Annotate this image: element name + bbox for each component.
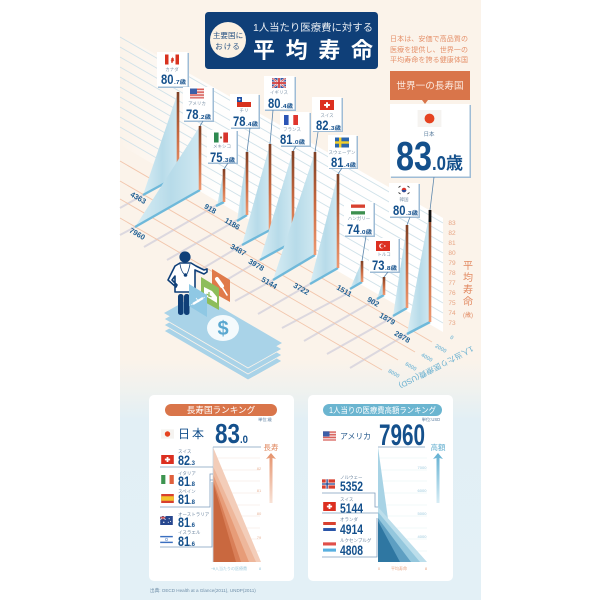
back wall with life-expectancy grid [120,34,443,332]
ranking list: 5352 [340,478,363,494]
callout: France: フランス [283,127,301,133]
spending axis [387,335,476,391]
life expectancy axis: 76 [448,290,456,297]
arrow: longevity: 長寿 [264,442,279,452]
area chart: spending [378,447,428,571]
pillar: France [260,151,293,260]
callout: UK [264,76,296,144]
pillar: Switzerland [273,152,315,280]
illustration: doctor on stack of money [164,251,282,380]
ranking list: ノルウェー [340,474,363,481]
callout: Japan: 83 [396,133,432,179]
life expectancy axis: 命 [463,295,473,308]
area chart: longevity: 79 [257,535,262,540]
panel: spending ranking: 単位:USD [422,416,440,423]
callout: UK: .4歳 [281,102,294,110]
text block: Japan description: 日本は、安価で高品質の [390,34,468,43]
callout: Switzerland [312,97,343,152]
pillar: UK [242,144,270,245]
text block: Japan description [390,34,468,64]
spending labels: 2878 [393,329,412,345]
life expectancy axis: 平 [463,261,473,272]
life expectancy axis: 寿 [463,283,473,296]
icon: syringe card [189,284,207,317]
ranking list: .3 [190,461,196,467]
heading pill: 長寿国ランキング [187,404,256,415]
spending labels: 5144 [260,275,279,291]
ranking list: ルクセンブルグ [340,537,372,544]
callout: Hungary [344,202,375,261]
callout: Canada: .7歳 [174,78,187,86]
area chart: longevity: 80 [257,511,262,516]
spending labels: 7960 [128,226,147,242]
text block: Japan description: 平均寿命を誇る健康体国 [390,55,468,64]
pillar: Sweden [310,174,338,284]
panel: longevity ranking: 単位:歳 [258,416,273,423]
life expectancy axis: 75 [448,300,456,307]
title: 1人当たり医療費に対する [253,21,373,34]
callout: Hungary: .0歳 [360,228,373,236]
ranking list: 81 [178,514,190,530]
money stack: $ [217,318,229,340]
callout: Canada: 80 [161,71,174,87]
callout: Korea [389,183,420,225]
callout: USA [183,87,214,126]
pillar: Mexico [216,169,224,206]
banner: longest-lived country [390,71,470,104]
callout: Japan: 歳 [446,154,463,173]
ranking list: 81 [178,473,190,489]
top country: USA: 7960 [379,419,425,452]
ranking list: オランダ [340,516,358,523]
callout: Turkey [369,238,400,277]
ranking list: スペイン [178,489,196,494]
background panel [120,0,481,600]
pillar: Canada [143,92,178,195]
callout: UK: 80 [268,95,281,111]
banner: longest-lived country: 世界一の長寿国 [396,80,464,92]
ranking list: 4914 [340,521,363,537]
spending axis: 8000 [387,368,400,380]
arrow: longevity [264,442,279,503]
doctor figure [168,251,207,315]
area chart: spending: 7000 [418,465,427,470]
callout: Chile [230,94,260,152]
spending labels: 918 [203,202,218,216]
callout: Korea: 韓国 [400,196,409,203]
panel: longevity ranking [149,395,294,581]
callout: Japan [390,104,471,210]
callout: Turkey: トルコ [377,252,391,257]
life expectancy axis: 82 [448,230,456,237]
ranking list: 4808 [340,542,363,558]
ranking list: .8 [190,500,196,506]
ranking list: イタリア [178,470,196,477]
area chart: spending: 0 [378,566,381,571]
spending axis: 0 [449,335,454,341]
area chart: longevity: 82 [257,466,262,471]
callout: Mexico: メキシコ [213,144,231,149]
callout: Switzerland: 82 [316,117,329,133]
callout: France [280,112,311,151]
top country: USA: アメリカ [340,432,371,441]
spending labels [128,190,412,345]
callout: USA: アメリカ [188,101,206,107]
floor grid [120,161,432,370]
callout: Japan: 日本 [423,130,435,138]
arrow: spending [430,442,446,503]
chart: life expectancy by health spending, isometric [120,34,476,391]
life expectancy axis: 81 [448,240,456,247]
spending axis: 4000 [420,352,433,364]
pillar: USA [135,126,200,227]
ranking list: 81 [178,533,190,549]
spending labels: 3487 [229,242,248,258]
leader lines [160,447,261,547]
spending labels: 4363 [129,190,148,206]
area chart: spending: 6000 [418,488,427,493]
pillar: Turkey [377,277,384,299]
callout: UK: イギリス [270,90,288,95]
spending labels: 3722 [292,281,311,297]
life expectancy axis: 78 [448,270,456,277]
callout: Korea: 80 [393,202,406,218]
top country: Japan [161,418,248,449]
top country: Japan: .0 [240,434,248,446]
callout: Sweden: 81 [331,154,344,170]
callout: Chile: .4歳 [246,120,259,128]
callout: Switzerland: .3歳 [329,124,342,132]
heading pill: 1人当りの医療費高額ランキング [329,405,436,415]
callout: Turkey: .8歳 [385,264,398,272]
title: おける [215,42,241,51]
callout: Mexico [207,130,238,169]
spending labels: 1879 [378,311,397,327]
callout: Chile: チリ [240,108,248,113]
top country: Japan: 日本 [178,427,206,441]
pillar: Korea [393,225,407,316]
ranking list [160,449,210,549]
spending labels: 1186 [223,216,242,232]
life expectancy axis: (歳) [463,311,473,319]
callout: France: 81 [280,131,293,147]
callout: Mexico: 75 [210,149,223,165]
spending labels: 902 [366,295,381,309]
life expectancy axis: 80 [448,250,456,257]
source note: 出典: OECD Health at a Glance(2011), UNDP(2011) [150,587,256,594]
ranking list: 5144 [340,500,363,516]
area chart: longevity: 8 [259,566,262,571]
callout: USA: 78 [186,106,199,122]
callout: Switzerland: スイス [320,113,334,118]
area chart: longevity: 一人当たりの医療費 [211,565,247,571]
top country: USA [323,419,425,452]
area chart: spending: 8 [425,566,428,571]
callout: Canada [157,52,189,88]
callout: Sweden: スウェーデン [328,149,356,156]
area chart: spending: 平均寿命 [391,565,407,571]
callout: Korea: .3歳 [406,209,419,217]
area chart: spending: 4000 [418,534,427,539]
top country: Japan: 83 [215,418,240,449]
icon: ambulance card [201,277,219,310]
ranking list: .6 [190,542,196,548]
callout: Hungary: ハンガリー [348,215,371,222]
life expectancy axis: 74 [448,310,456,317]
spending axis: 2000 [434,343,447,355]
heading pill [323,404,442,416]
life expectancy axis: 83 [448,220,456,227]
area chart: longevity [211,447,262,571]
life expectancy axis: 77 [448,280,456,287]
text block: Japan description: 医療を提供し、世界一の [390,45,468,54]
callout: Japan: .0 [432,153,446,175]
ranking list: スイス [178,449,192,454]
pillar: Japan [407,210,430,334]
title [205,12,378,69]
life expectancy axis: 均 [463,271,473,284]
ranking list: 81 [178,491,190,507]
title: 主要国に [213,30,243,40]
callout: Sweden [328,135,358,174]
area chart: longevity: 0 [213,566,216,571]
life expectancy axis: 79 [448,260,456,267]
heading pill [165,404,277,416]
area chart: spending: 5000 [418,511,427,516]
callout: Mexico: .3歳 [223,156,236,164]
arrow: spending: 高額 [430,442,446,452]
pillar: Chile [237,152,247,221]
ranking list: オーストラリア [178,512,210,518]
spending labels: 3978 [247,257,266,273]
callout: Hungary: 74 [347,221,360,237]
ranking list: .8 [190,482,196,488]
ranking list: スイス [340,497,354,502]
leader lines [322,447,425,557]
callout: Turkey: 73 [372,257,385,273]
callout: Chile: 78 [233,113,246,129]
life expectancy axis [448,220,473,327]
life expectancy axis: 73 [448,320,456,327]
ranking list: 82 [178,452,190,468]
callout: USA: .2歳 [199,113,212,121]
area chart: longevity: 81 [257,488,262,493]
title: 平均寿命 [253,38,373,63]
ranking list: イスラエル [178,530,201,536]
ranking list [322,474,372,558]
callout: Sweden: .4歳 [344,161,357,169]
ranking list: .6 [190,523,196,529]
icon: medicine card [212,269,230,302]
spending axis: 1人当たり医療費(USD) [397,344,476,391]
callout: France: .0歳 [293,138,306,146]
pillar: Hungary [350,261,362,289]
spending axis: 6000 [404,361,417,373]
panel: spending ranking [308,395,453,581]
callout: Canada: カナダ [165,66,179,73]
spending labels: 1511 [335,283,354,299]
